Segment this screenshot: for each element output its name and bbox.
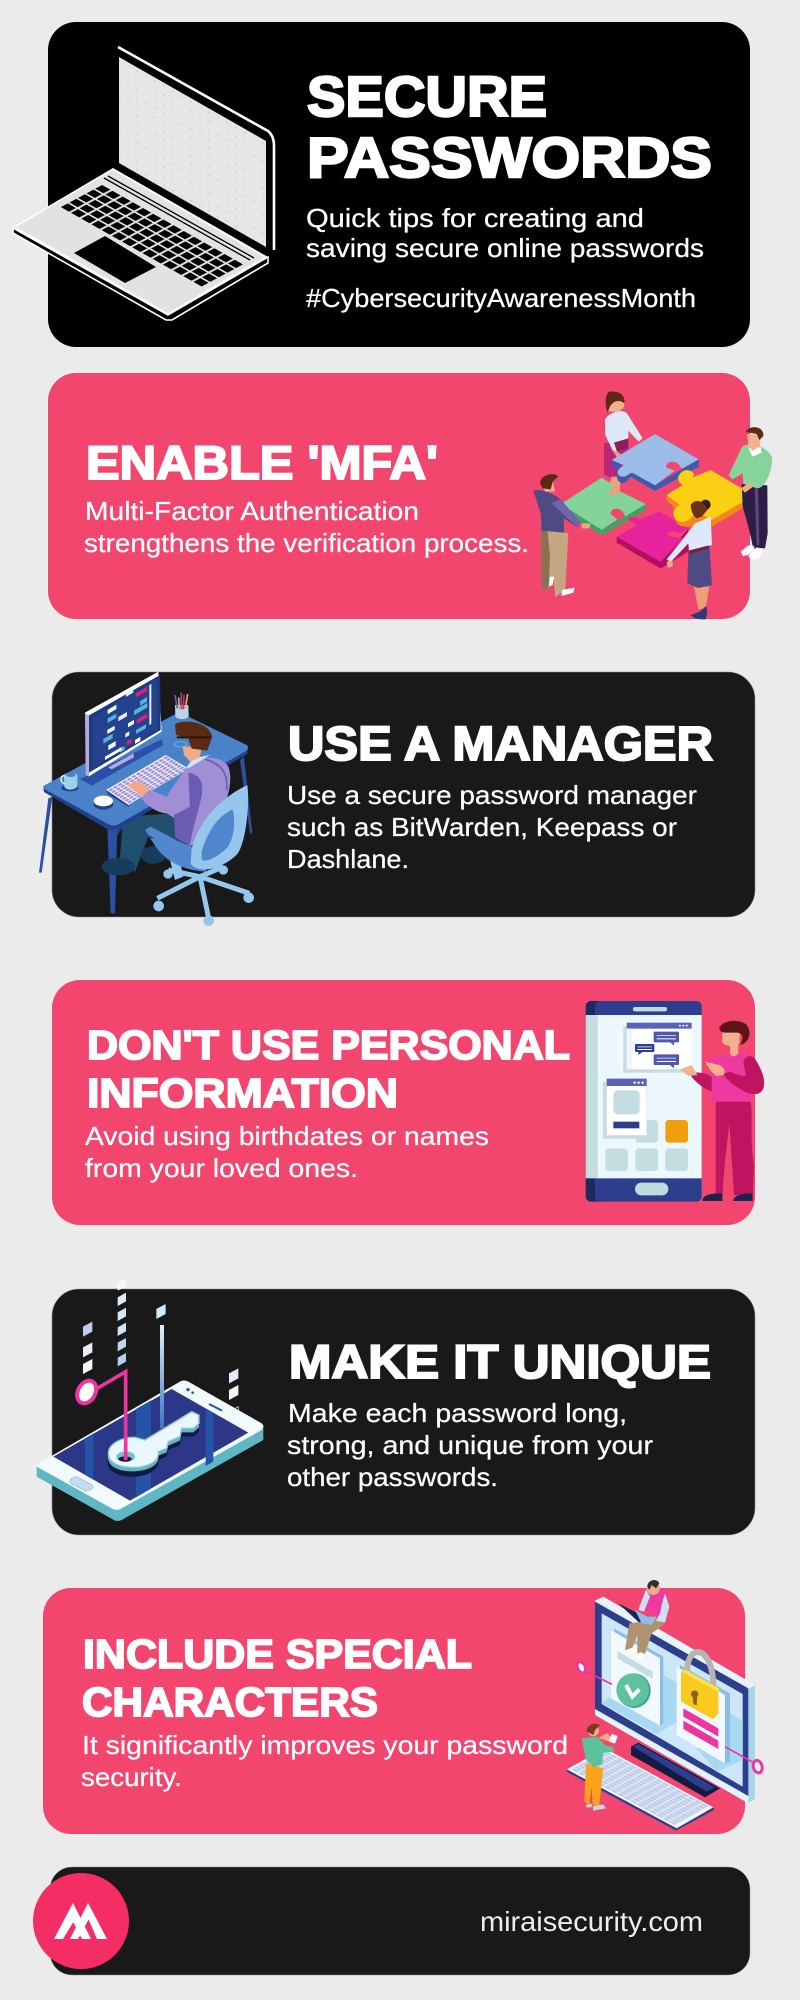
panel: special characters: [43, 1580, 763, 1834]
header card: [48, 22, 750, 347]
panel: use a manager: [39, 672, 755, 926]
special characters card: [43, 1588, 745, 1834]
subtitle: [306, 203, 704, 263]
text: manager description: Dashlane.: [287, 844, 409, 874]
text: MFA description: strengthens the verification process.: [84, 528, 529, 558]
text: unique description: other passwords.: [287, 1462, 498, 1492]
subtitle: Quick tips for creating and: [306, 203, 644, 233]
heading: use a manager: USE A MANAGER: [288, 718, 713, 771]
subtitle: saving secure online passwords: [306, 233, 704, 263]
MFA card: [48, 373, 750, 619]
illustration: person with phone: [586, 1001, 764, 1202]
text: unique description: Make each password long,: [288, 1398, 627, 1428]
text: manager description: such as BitWarden, Keepass or: [287, 812, 677, 842]
title: [307, 65, 712, 190]
text: special characters description: [81, 1730, 568, 1792]
heading: don't use personal information: INFORMATION: [87, 1070, 398, 1116]
heading: make it unique: MAKE IT UNIQUE: [289, 1335, 711, 1388]
heading: don't use personal information: DON'T USE PERSONAL: [87, 1022, 570, 1068]
title: PASSWORDS: [307, 126, 712, 190]
illustration: monitor with lock: [567, 1580, 763, 1831]
logo: mirai badge: [33, 1873, 129, 1969]
text: unique description: strong, and unique from your: [287, 1430, 653, 1460]
heading: include special characters: CHARACTERS: [82, 1679, 378, 1725]
text: unique description: [287, 1398, 653, 1492]
text: personal information description: [85, 1121, 489, 1183]
manager card: [52, 672, 755, 917]
text: special characters description: security.: [81, 1762, 182, 1792]
text: MFA description: Multi-Factor Authentication: [85, 496, 419, 526]
illustration: key on phone: [37, 1278, 263, 1521]
personal information card: [52, 980, 755, 1225]
panel: footer: [33, 1867, 750, 1975]
text: special characters description: It significantly improves your password: [82, 1730, 568, 1760]
unique card: [52, 1289, 755, 1535]
heading: don't use personal information: [87, 1022, 570, 1116]
illustration: person at desk: [39, 672, 254, 926]
text: personal information description: from your loved ones.: [85, 1153, 358, 1183]
heading: include special characters: INCLUDE SPECIAL: [83, 1631, 472, 1677]
panel: header: [13, 22, 750, 347]
footer bar: [50, 1867, 750, 1975]
website url: miraisecurity.com: [480, 1906, 703, 1937]
panel: enable MFA: [48, 373, 772, 619]
panel: personal information: [52, 980, 764, 1225]
text: manager description: Use a secure password manager: [287, 780, 697, 810]
icon: laptop: [13, 47, 276, 320]
heading: enable MFA: ENABLE 'MFA': [86, 436, 438, 489]
text: manager description: [287, 780, 697, 874]
illustration: team with puzzle: [533, 392, 772, 619]
text: personal information description: Avoid using birthdates or names: [85, 1121, 489, 1151]
text: MFA description: [84, 496, 529, 558]
panel: make it unique: [37, 1278, 755, 1535]
heading: include special characters: [82, 1631, 472, 1725]
title: SECURE: [307, 65, 547, 129]
hashtag: #CybersecurityAwarenessMonth: [306, 283, 696, 313]
